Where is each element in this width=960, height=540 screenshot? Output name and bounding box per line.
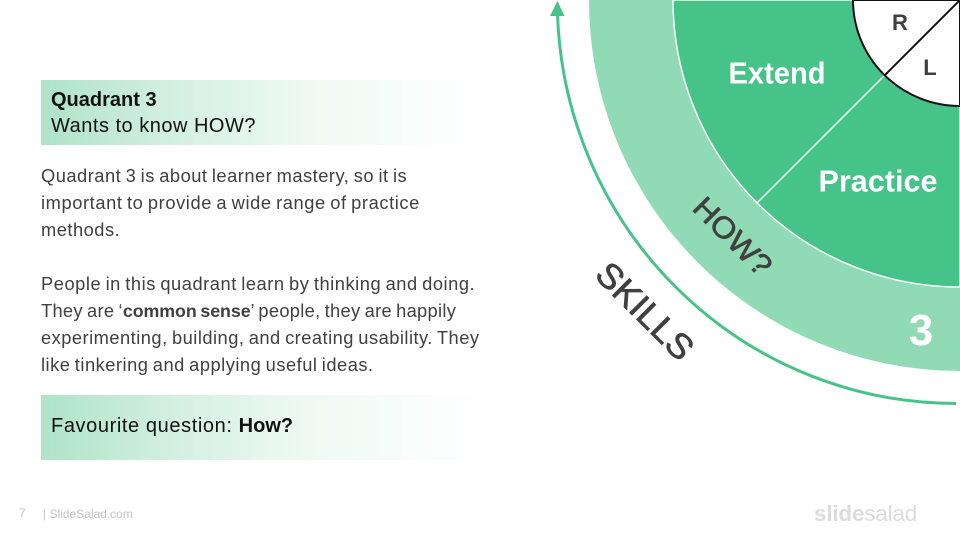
text block: learner mastery paragraph xyxy=(41,165,420,240)
text block: learner mastery paragraph: Quadrant 3 is about learner mastery, so it is xyxy=(41,165,407,186)
label: Practice: Practice xyxy=(818,164,938,198)
centre quarter circle: R and L xyxy=(853,0,960,106)
text block: common sense paragraph: like tinkering and applying useful ideas. xyxy=(41,354,374,375)
footer: logo wordmark: slidesalad xyxy=(814,501,917,526)
centre quarter circle: R and L: L xyxy=(923,55,937,80)
label: HOW?: HOW? xyxy=(686,191,778,283)
text block: common sense paragraph: experimenting, building, and creating usability. They xyxy=(41,327,479,348)
number: 3: 3 xyxy=(909,306,933,355)
outer ring: quadrant band xyxy=(589,0,960,371)
heading band: Quadrant 3: Quadrant 3 xyxy=(51,89,157,111)
text block: common sense paragraph: They are ‘common sense’ people, they are happily xyxy=(41,300,456,321)
arrow: skills progression xyxy=(550,1,956,404)
text block: common sense paragraph: People in this quadrant learn by thinking and doing. xyxy=(41,273,475,294)
heading band: Quadrant 3: Wants to know HOW? xyxy=(51,115,256,137)
centre quarter circle: R and L: R xyxy=(892,10,908,35)
callout: favourite question xyxy=(41,395,481,460)
label: Extend: Extend xyxy=(728,56,826,90)
heading band: Quadrant 3 xyxy=(41,80,481,145)
inner ring: Extend and Practice segments xyxy=(673,0,960,287)
text block: learner mastery paragraph: methods. xyxy=(41,219,120,240)
footer: site name: | SlideSalad.com xyxy=(43,507,133,521)
callout: favourite question: Favourite question: How? xyxy=(51,415,293,437)
label: SKILLS: SKILLS xyxy=(588,254,702,368)
text block: learner mastery paragraph: important to provide a wide range of practice xyxy=(41,192,420,213)
text block: common sense paragraph xyxy=(41,273,479,375)
footer: page number: 7 xyxy=(19,506,26,520)
